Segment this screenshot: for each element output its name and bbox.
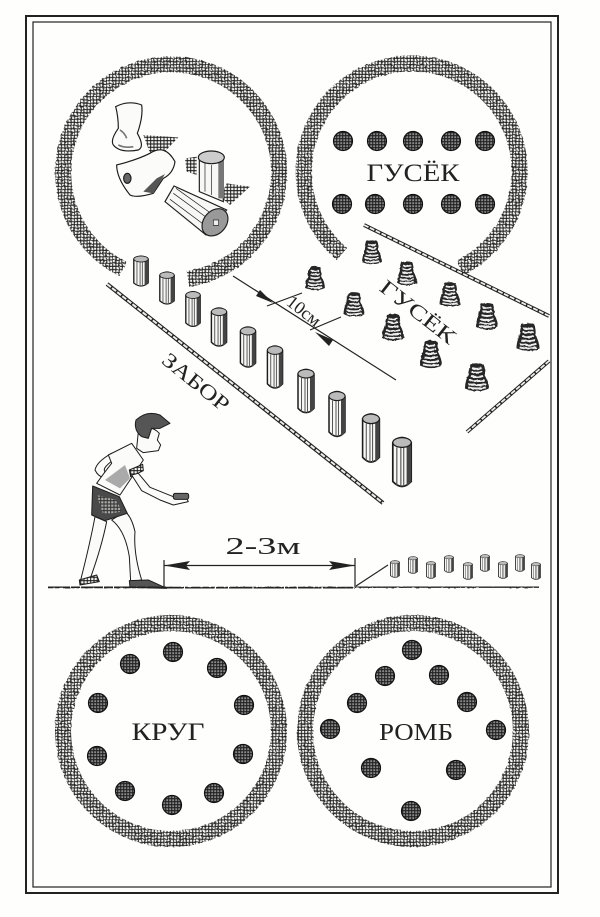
small diagonal leader to pin row xyxy=(356,565,388,586)
goose-shaped bell pieces xyxy=(305,240,540,391)
label: ГУСЁК diagonal: ГУСЁК xyxy=(375,275,462,350)
fence: left diagonal xyxy=(107,284,383,503)
dimension: 10 cm between lines xyxy=(233,276,396,380)
boy throwing a piece xyxy=(79,413,189,588)
hatched ring open at bottom xyxy=(63,64,279,279)
hatched ring xyxy=(63,623,279,839)
label: ГУСЁК: ГУСЁК xyxy=(366,160,460,187)
label: 10см: 10см xyxy=(283,291,325,331)
panel: bottom-right ring, rhombus formation xyxy=(305,623,521,839)
hair xyxy=(135,413,170,438)
panel: top-left ring with game pieces xyxy=(63,64,279,279)
fence: lower right xyxy=(467,361,549,432)
label: РОМБ: РОМБ xyxy=(379,720,453,746)
hatched ring open at bottom xyxy=(304,63,520,268)
dots in a rhombus xyxy=(320,640,506,820)
row of wooden pins along the fence xyxy=(134,256,411,486)
front leg xyxy=(112,512,142,582)
dots in two rows xyxy=(332,132,494,214)
icon: bones and wooden logs xyxy=(112,103,250,241)
small pins seen from the side xyxy=(391,555,540,579)
neck and face xyxy=(137,428,161,453)
fence: upper right xyxy=(364,225,549,316)
ground line xyxy=(48,587,539,588)
panel: bottom-left ring, circle formation xyxy=(63,623,279,839)
hatched ring xyxy=(305,623,521,839)
label: 2-3м: 2-3м xyxy=(226,534,300,560)
far arm behind back xyxy=(95,453,113,477)
panel: top-right ring with goose formation xyxy=(304,63,520,268)
shoes xyxy=(79,575,99,585)
near arm xyxy=(132,473,188,505)
label: ЗАБОР: ЗАБОР xyxy=(157,348,235,416)
back leg xyxy=(81,517,107,580)
dimension: 2-3 m xyxy=(164,534,355,587)
dots in a circle xyxy=(88,642,254,814)
thrown piece in hand xyxy=(173,493,189,499)
shirt xyxy=(97,443,143,495)
shorts xyxy=(92,486,127,521)
label: КРУГ: КРУГ xyxy=(132,719,204,746)
